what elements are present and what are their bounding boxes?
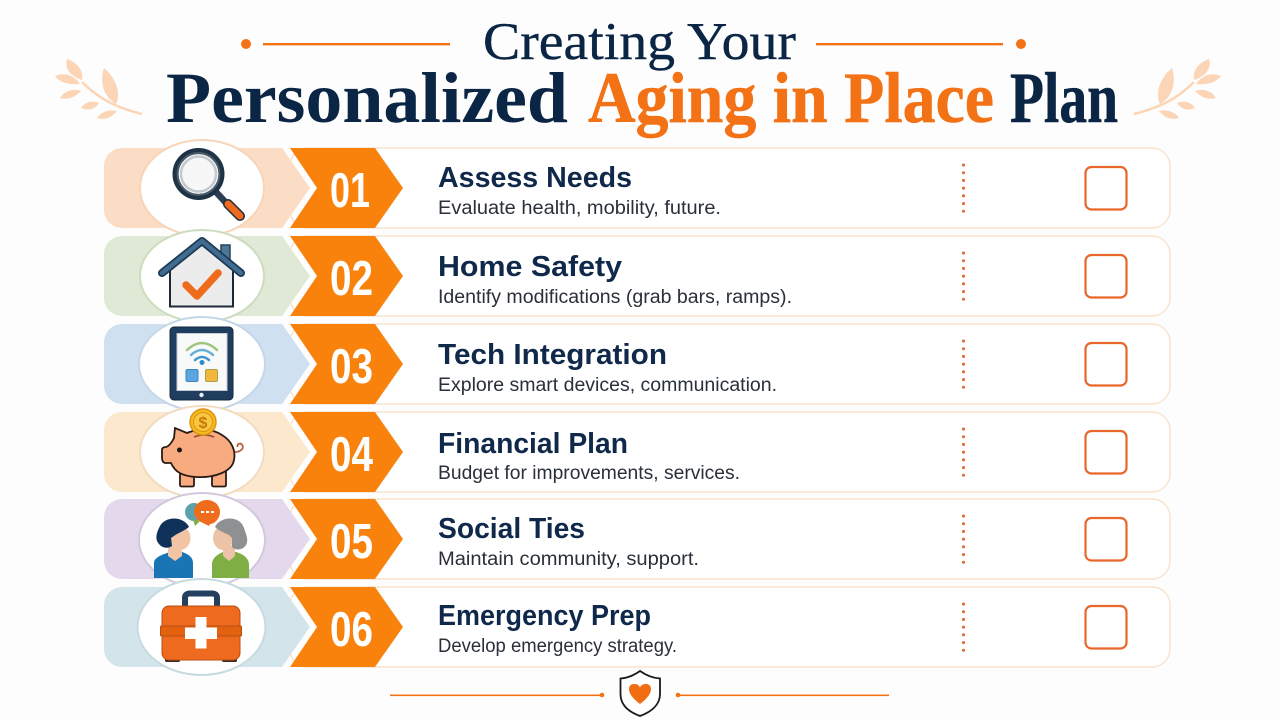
row 5: Social Ties: Social Ties	[438, 513, 585, 545]
row 4: Financial Plan: 04	[330, 428, 373, 482]
row 3: Tech Integration	[104, 324, 1170, 404]
row 6: Emergency Prep: Develop emergency strategy.	[438, 636, 677, 657]
icon: first aid kit	[138, 579, 266, 675]
row 3: Tech Integration: 03	[330, 340, 373, 394]
row 6: Emergency Prep: Emergency Prep	[438, 600, 651, 632]
icon: shield with heart	[620, 671, 660, 716]
row 1: Assess Needs	[104, 148, 1170, 228]
row 6: Emergency Prep: 06	[330, 603, 373, 657]
title line 1: Creating Your	[483, 13, 796, 71]
icon: piggy bank with coin	[140, 406, 264, 498]
title ornament: left rule and dot	[241, 39, 450, 49]
row 2: Home Safety: Home Safety	[438, 251, 622, 283]
footer rule left	[390, 693, 604, 697]
row 4: Financial Plan	[104, 412, 1170, 492]
title ornament: right rule and dot	[816, 39, 1026, 49]
row 5: Social Ties: 05	[330, 515, 373, 569]
row 4: Financial Plan: Financial Plan	[438, 428, 628, 460]
row 3: Tech Integration: Tech Integration	[438, 339, 667, 371]
row 2: Home Safety	[104, 236, 1170, 316]
title line 2: Personalized	[166, 58, 568, 138]
row 4: Financial Plan: Budget for improvements, services.	[438, 463, 740, 484]
row 3: Tech Integration: Explore smart devices, communication.	[438, 375, 777, 396]
title line 2	[166, 58, 1118, 138]
row 1: Assess Needs: 01	[330, 164, 370, 218]
icon: magnifying glass	[140, 140, 264, 236]
title line 2: Plan	[1010, 58, 1118, 138]
row 1: Assess Needs: Evaluate health, mobility, future.	[438, 198, 721, 219]
row 2: Home Safety: 02	[330, 252, 373, 306]
title line 2: Aging in Place	[588, 58, 994, 138]
row 6: Emergency Prep	[104, 587, 1170, 667]
icon: tablet with wifi	[139, 317, 265, 411]
icon: house with check mark	[140, 230, 264, 322]
row 5: Social Ties	[104, 499, 1170, 579]
footer rule right	[676, 693, 889, 697]
row 1: Assess Needs: Assess Needs	[438, 162, 632, 194]
row 2: Home Safety: Identify modifications (grab bars, ramps).	[438, 287, 792, 308]
icon: left leaf sprig	[55, 59, 142, 119]
icon: piggy bank with coin: $	[199, 415, 208, 432]
row 5: Social Ties: Maintain community, support.	[438, 549, 699, 570]
icon: two people talking	[139, 493, 265, 587]
icon: right leaf sprig	[1134, 59, 1221, 119]
